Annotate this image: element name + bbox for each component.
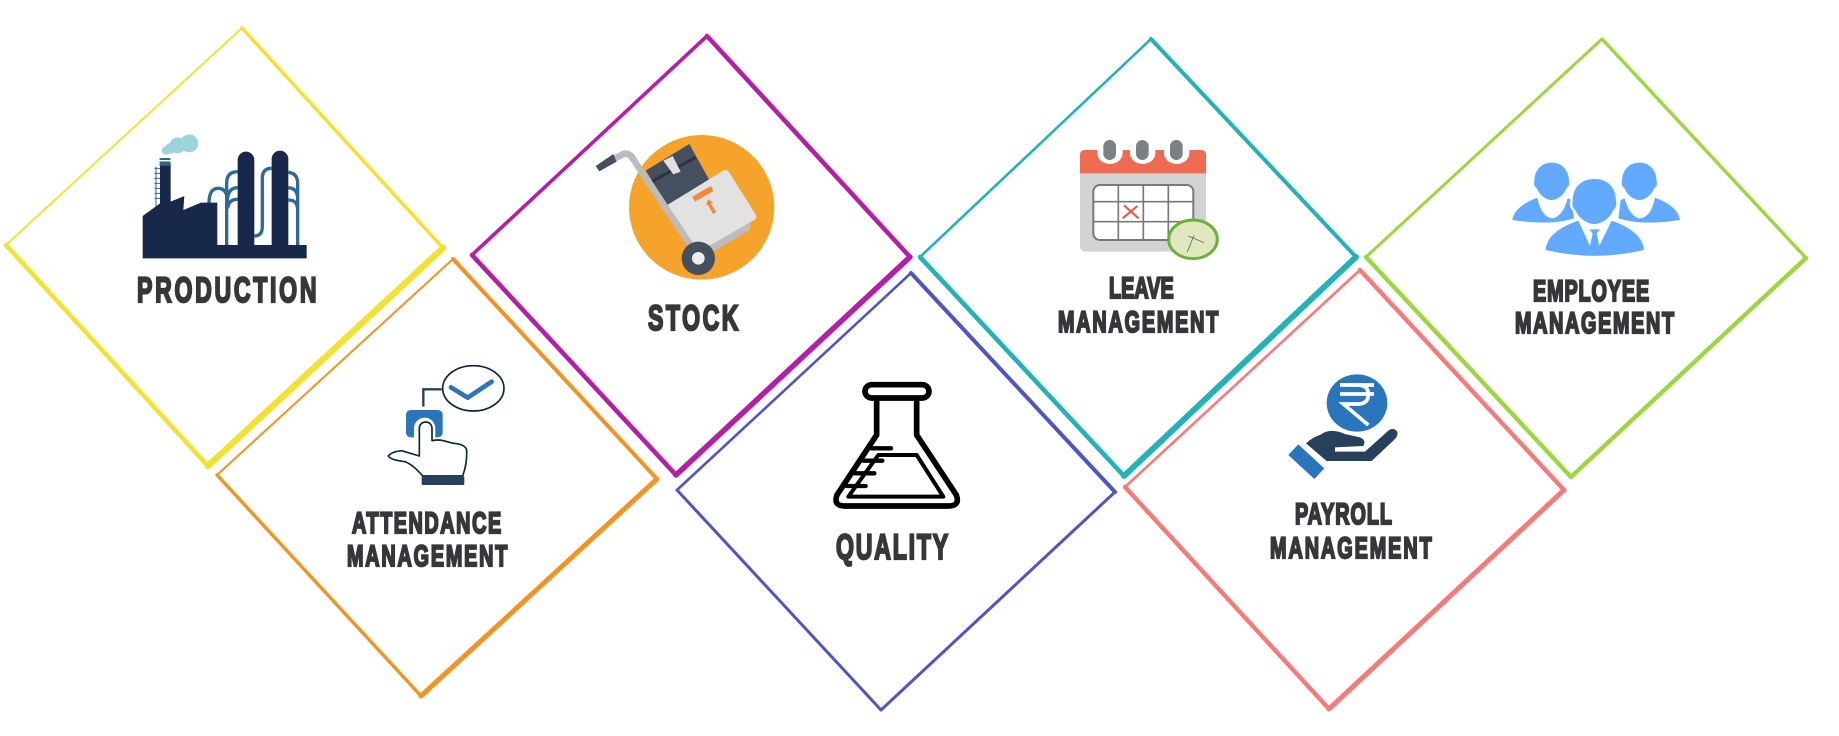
label: leave management xyxy=(1058,272,1219,339)
panel: production xyxy=(6,28,443,466)
icon: factory xyxy=(143,134,307,258)
diamond border: red xyxy=(1125,270,1564,709)
label: stock: STOCK xyxy=(648,299,739,338)
icon: hand truck with boxes xyxy=(596,135,774,280)
panel: employee management xyxy=(1366,39,1806,477)
panel: leave management xyxy=(920,39,1356,476)
icon: flask xyxy=(836,385,957,506)
label: payroll management xyxy=(1270,498,1432,565)
label: attendance management xyxy=(347,507,508,573)
panel: stock xyxy=(472,36,910,475)
icon: hand holding rupee coin xyxy=(1288,374,1398,479)
diamond border: blue xyxy=(677,273,1115,710)
diamond border: orange xyxy=(217,259,657,696)
label: employee management xyxy=(1515,275,1674,340)
label: employee management: MANAGEMENT xyxy=(1515,307,1674,340)
icon: finger on touch button with check xyxy=(388,366,504,485)
diamond border: yellow xyxy=(6,28,443,466)
diamond border: purple xyxy=(472,36,910,475)
label: quality: QUALITY xyxy=(836,528,948,567)
label: employee management: EMPLOYEE xyxy=(1533,275,1649,308)
panel: payroll management xyxy=(1125,270,1564,709)
label: leave management: LEAVE xyxy=(1109,272,1174,305)
panel: quality xyxy=(677,273,1115,710)
panel: attendance management xyxy=(217,259,657,696)
label: attendance management: MANAGEMENT xyxy=(347,540,508,573)
diamond border: teal xyxy=(920,39,1356,476)
label: leave management: MANAGEMENT xyxy=(1058,306,1219,339)
label: attendance management: ATTENDANCE xyxy=(352,507,501,540)
icon: calendar with clock xyxy=(1080,140,1217,259)
label: payroll management: PAYROLL xyxy=(1295,498,1392,531)
diamond border: green xyxy=(1366,39,1806,477)
label: payroll management: MANAGEMENT xyxy=(1270,532,1432,565)
icon: three people xyxy=(1512,163,1680,260)
label: production: PRODUCTION xyxy=(137,271,317,310)
